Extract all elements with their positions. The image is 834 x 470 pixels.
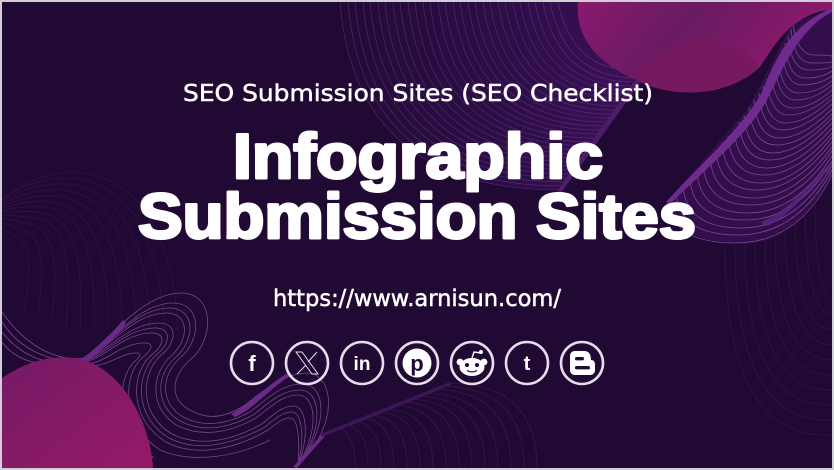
icon: facebook bbox=[231, 342, 273, 384]
title line 2: Submission Sites bbox=[138, 182, 696, 252]
title line 1: Infographic bbox=[233, 122, 603, 192]
icon: linkedin bbox=[341, 342, 383, 384]
icon: x bbox=[286, 342, 328, 384]
icon: reddit bbox=[451, 342, 493, 384]
social icons row bbox=[231, 342, 603, 384]
wave lines: right bbox=[668, 22, 832, 243]
website url: https://www.arnisun.com/ bbox=[273, 286, 561, 312]
wave lines: top centre bbox=[340, 2, 640, 190]
wash: right bbox=[668, 10, 832, 244]
icon: tumblr: t bbox=[524, 353, 531, 375]
blob: bottom left bbox=[2, 357, 153, 468]
main title bbox=[138, 122, 696, 252]
icon: pinterest: p bbox=[410, 351, 424, 376]
icon: linkedin: in bbox=[354, 354, 370, 375]
wave lines: lower left lobes bbox=[83, 293, 329, 465]
icon: blogger bbox=[561, 342, 603, 384]
wave lines: bottom centre bbox=[335, 383, 537, 468]
wave lines: left faint bbox=[2, 172, 178, 330]
purple band: right bbox=[666, 8, 832, 204]
blob: top right bbox=[578, 2, 832, 93]
purple band: lower left bbox=[80, 320, 126, 363]
icon: tumblr bbox=[506, 342, 548, 384]
purple band: lower centre bbox=[231, 372, 292, 417]
purple band: bottom bbox=[293, 434, 325, 468]
wave lines: lower right faint bbox=[725, 195, 832, 435]
purple band: right edge bbox=[760, 162, 832, 226]
purple band: bottom centre bbox=[320, 382, 451, 437]
purple band: top centre bbox=[548, 72, 645, 205]
icon: facebook: f bbox=[248, 351, 256, 376]
wave lines: left bright bbox=[2, 312, 85, 364]
subtitle: SEO Submission Sites (SEO Checklist) bbox=[183, 81, 653, 107]
icon: pinterest bbox=[396, 342, 438, 384]
wash: top centre bbox=[340, 2, 640, 190]
